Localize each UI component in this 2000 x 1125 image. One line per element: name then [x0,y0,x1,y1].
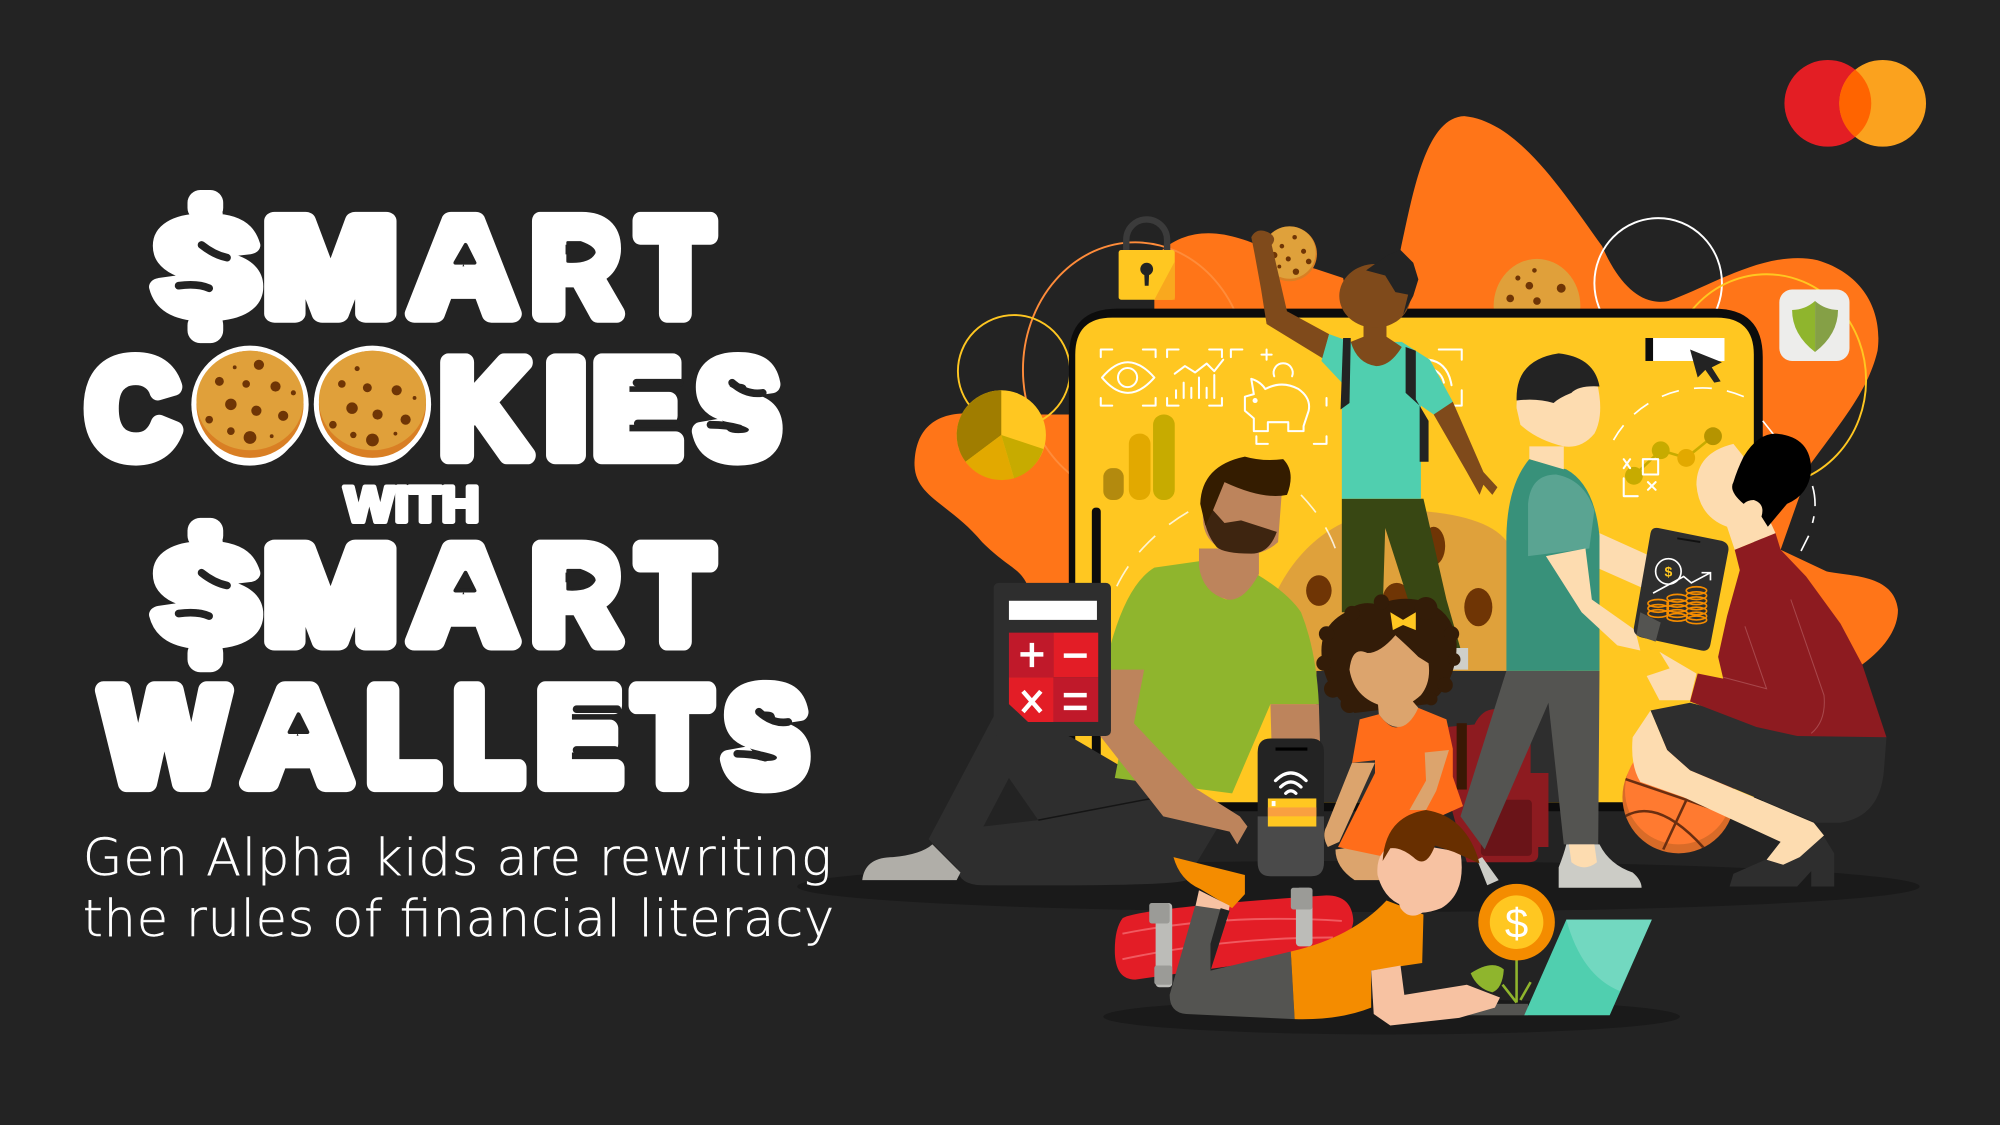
hair [1316,594,1460,713]
title line: smart: A [411,192,516,343]
icon: chart scan [1167,349,1223,406]
laptop base [1459,1004,1528,1015]
flower coin: $ [1505,900,1528,947]
subtitle: Gen Alpha kids are rewriting [83,829,832,888]
tablet [1634,528,1728,651]
bars chart [1103,415,1175,500]
title line: cookies: O [202,333,298,484]
head [1529,446,1564,469]
title line: wallets: T [635,661,710,812]
title line: cookies: E [593,333,681,484]
title line: smart: T [639,192,712,343]
tablet: $ [1664,564,1672,580]
hair [1366,250,1418,315]
icon: qr code [1624,459,1658,496]
subtitle [83,829,834,949]
laptop screen [1524,920,1652,1015]
person: teal shirt man [1460,353,1651,888]
hair [1200,457,1291,526]
shirt [1321,334,1453,499]
arm [1371,966,1500,1026]
icon: piggy bank [1231,349,1327,444]
arm [1546,548,1640,651]
title line: smart: R [532,192,620,343]
bow [1390,612,1416,630]
icon: calculator [994,583,1111,736]
neck [1199,548,1259,600]
foot [1173,857,1245,908]
title line: wallets: E [537,661,621,812]
infographic canvas [84,60,1926,1034]
shirt [1506,459,1599,671]
icon: title cookie one [191,346,309,463]
skirt [1651,703,1886,823]
tablet inner bar [1092,508,1101,814]
legs [1335,842,1408,880]
title line: cookies: I [546,333,586,484]
title line: wallets: S [724,661,807,812]
title line: smart again: R [532,520,620,671]
head [1203,478,1282,554]
neck and head [1351,312,1402,366]
skateboard [1115,888,1353,987]
coin stacks [1648,587,1707,624]
search box with cursor [1645,338,1724,383]
back arm [1599,533,1651,589]
face [1349,635,1429,708]
title line: cookies: K [440,333,529,484]
title [87,192,807,812]
arms [1251,230,1329,358]
beard [1203,497,1277,554]
thin circles behind tablet [958,218,1866,497]
person: woman with tablet [1632,434,1886,886]
title line: with: WITH [344,477,480,533]
legs [1342,499,1462,656]
title line: cookies: O [324,333,421,484]
backpack on floor [1446,709,1548,862]
dashed arc [1105,495,1339,625]
person: standing kid with cookie [1251,226,1497,670]
leg [1632,710,1824,865]
title line: wallets: A [245,661,350,812]
icon: shield tile [1779,290,1849,361]
raised cookie [1262,226,1317,281]
person: boy with laptop [1170,810,1652,1026]
icon: basketball [1622,737,1735,853]
title line: smart again: T [639,520,712,671]
title letter counters [179,242,788,758]
icon: padlock [1119,219,1175,300]
icon: eye scan [1101,349,1156,406]
hand [1647,652,1696,700]
shoe [862,844,960,880]
icon: fingerprint scan [1426,349,1462,406]
shirt [1105,561,1319,793]
title line: wallets: W [103,661,226,812]
logo: overlapping circles [1784,60,1926,147]
icon: title cookie two [314,346,431,463]
title line: smart again: A [411,520,516,671]
ground shadows [797,861,1920,1034]
shirt [1291,901,1423,1019]
arm left [1324,763,1375,847]
shoe heel [1730,837,1834,886]
subtitle: the rules of financial literacy [83,890,834,949]
neck and head [1395,893,1423,916]
icon: contactless phone [1258,739,1324,876]
title line: wallets: L [367,661,439,812]
title line: smart again: $ [158,520,254,671]
flower coin [1471,884,1555,1003]
title line: cookies: C [87,333,179,484]
title line: cookies: S [696,333,779,484]
title dollar sign stems [188,190,223,672]
trousers [929,709,1224,885]
title line: smart: $ [158,192,254,343]
arm left [1093,670,1247,844]
orange blobs behind tablet [915,116,1898,665]
trousers [1170,906,1295,1019]
person: bearded man [862,457,1321,885]
title line: smart: M [264,192,397,343]
legs [1460,671,1599,849]
arm right [1409,750,1449,810]
tablet screen [1069,309,1763,814]
title line: smart again: M [264,520,397,671]
arm right [1270,704,1321,793]
dress [1338,708,1463,856]
dashed right arc outside tablet [1114,421,1815,676]
backpack straps [1341,338,1429,462]
hair [1732,434,1811,527]
shoes [1559,844,1642,888]
icon: cookie behind tablet [1494,259,1580,353]
neck [1378,699,1418,727]
head [1696,444,1776,550]
person: girl in orange dress [1316,594,1463,880]
jacket [1690,533,1886,737]
icon: pie chart [957,390,1046,480]
big screen cookie [1273,510,1566,811]
title line: wallets: L [454,661,523,812]
network dots [1625,427,1722,485]
